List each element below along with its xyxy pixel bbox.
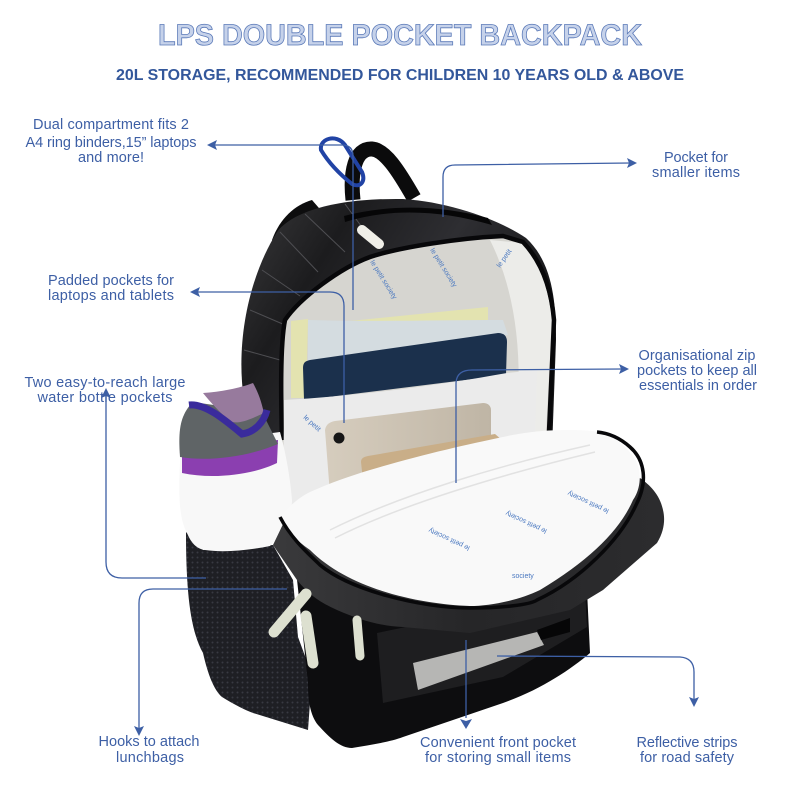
text: dual compartment: Dual compartment fits 2 xyxy=(33,117,189,133)
arrow: water bottle pockets xyxy=(101,388,206,578)
text: smaller items pocket xyxy=(652,150,740,181)
text: water bottle pockets: water bottle pockets xyxy=(36,390,172,406)
text: padded pockets: laptops and tablets xyxy=(48,288,174,304)
text: hooks xyxy=(98,734,200,766)
arrow: padded pockets xyxy=(190,287,344,423)
icon: lilac cap top xyxy=(203,383,264,422)
icon: main compartment lining xyxy=(281,237,552,470)
icon: zip pulls xyxy=(274,594,360,663)
lining logos: le petit society xyxy=(428,247,458,289)
backpack illustration xyxy=(179,138,664,748)
text: zip pockets: pockets to keep all xyxy=(637,363,757,379)
text: dual compartment xyxy=(26,117,196,166)
arrow: hooks xyxy=(134,589,287,736)
icon: carabiner xyxy=(321,138,363,185)
text: water bottle pockets xyxy=(24,375,186,406)
arrow: smaller items pocket xyxy=(443,158,637,217)
text: zip pockets: Organisational zip xyxy=(638,348,756,364)
icon: purple band xyxy=(182,440,278,476)
icon: dark notebook xyxy=(303,333,507,400)
flap logos: society xyxy=(512,573,534,580)
flap logos: le petit society xyxy=(504,509,548,534)
icon: rear strap xyxy=(272,200,325,262)
arrow: dual compartment xyxy=(207,140,353,310)
icon: book xyxy=(361,434,502,490)
quilting seams xyxy=(244,204,375,360)
text: dual compartment: A4 ring binders,15” laptops xyxy=(26,135,196,151)
icon: dark slot xyxy=(537,618,570,640)
icon: tablet xyxy=(325,403,491,520)
icon: tablet camera xyxy=(334,432,344,444)
icon: quilted back panel xyxy=(241,199,556,450)
icon: zip pull xyxy=(362,230,379,244)
icon: flap top xyxy=(280,430,640,606)
lining logos: le petit xyxy=(496,248,513,269)
text: dual compartment: and more! xyxy=(78,150,144,166)
icon: white inner pocket xyxy=(283,370,537,530)
text: front pocket: for storing small items xyxy=(425,750,571,766)
icon: top zip pocket xyxy=(344,208,492,225)
text: zip pockets xyxy=(637,348,757,394)
flap logos: le petit society xyxy=(566,489,610,514)
lining logos xyxy=(302,247,513,433)
text: reflective strips: Reflective strips xyxy=(636,735,738,751)
text: zip pockets: essentials in order xyxy=(639,378,757,394)
icon: shiny gathered edge xyxy=(273,478,664,633)
arrow: front pocket xyxy=(460,640,472,729)
lining logos: le petit xyxy=(302,414,322,433)
text: smaller items pocket: Pocket for xyxy=(664,150,728,166)
title: LPS DOUBLE POCKET BACKPACK xyxy=(158,19,642,52)
text: water bottle pockets: Two easy-to-reach large xyxy=(24,375,186,391)
icon: flap rim xyxy=(280,432,643,608)
icon: zip rim xyxy=(281,236,554,440)
icon: front panel xyxy=(377,590,587,703)
arrow: zip pockets xyxy=(456,364,629,483)
text: padded pockets xyxy=(48,273,174,304)
text: smaller items pocket: smaller items xyxy=(652,165,740,181)
icon: front pocket body xyxy=(296,570,590,748)
icon: pale blue folder xyxy=(308,320,508,365)
text: reflective strips xyxy=(636,735,738,766)
icon: reflective strip xyxy=(413,632,544,690)
icon: top handle xyxy=(352,149,414,200)
lining logos: le petit society xyxy=(368,259,398,301)
text: hooks: Hooks to attach xyxy=(98,734,200,750)
zip lines on flap xyxy=(330,445,595,538)
text: reflective strips: for road safety xyxy=(640,750,735,766)
icon: water bottle body xyxy=(179,432,292,551)
text: padded pockets: Padded pockets for xyxy=(48,273,174,289)
icon: mesh pocket xyxy=(186,532,312,730)
icon: grey bottle cap xyxy=(179,402,278,459)
text: front pocket: Convenient front pocket xyxy=(420,735,576,751)
icon: right side lining xyxy=(490,240,552,432)
flap logos xyxy=(427,489,610,580)
subtitle: 20L STORAGE, RECOMMENDED FOR CHILDREN 10 YEARS OLD & ABOVE xyxy=(116,67,684,84)
text: front pocket xyxy=(420,735,576,766)
icon: yellow folder xyxy=(291,307,488,398)
arrow: reflective strips xyxy=(497,656,699,707)
flap logos: le petit society xyxy=(427,526,471,551)
text: hooks: lunchbags xyxy=(116,750,184,766)
icon: purple cap ring xyxy=(189,405,267,434)
